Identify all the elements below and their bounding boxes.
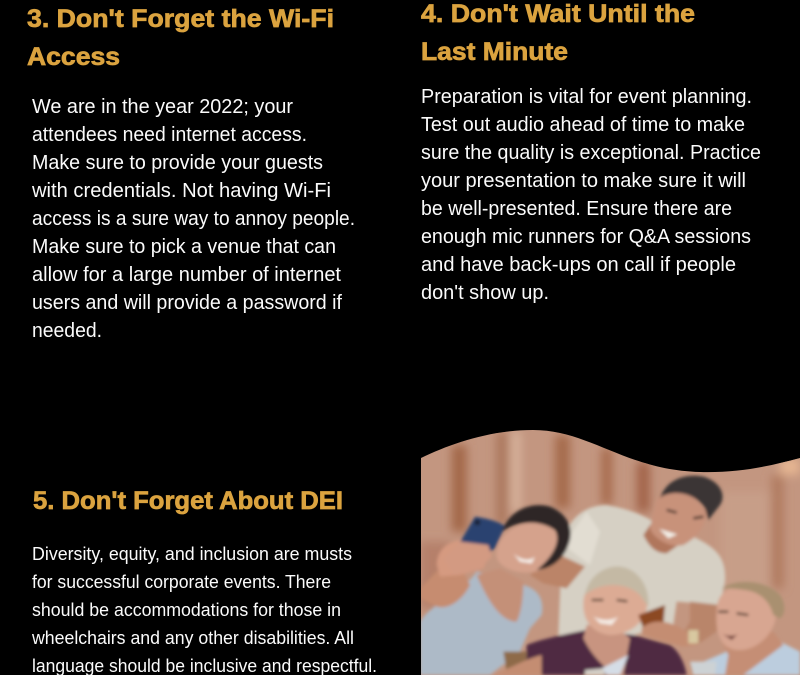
man in light shirt bbox=[700, 642, 800, 675]
glass and hand bbox=[638, 605, 665, 628]
text block: section 4 body: Test out audio ahead of time to make bbox=[421, 114, 745, 136]
woman's face and hair bbox=[496, 523, 560, 572]
woman in grey top bbox=[420, 572, 542, 675]
text block: section 5 body bbox=[31, 543, 377, 675]
drinks at bottom bbox=[503, 652, 527, 672]
text block: section 3 body: access is a sure way to annoy people. bbox=[32, 208, 355, 230]
text block: section 4 body: don't show up. bbox=[421, 282, 549, 304]
heading: section 4: Last Minute bbox=[421, 38, 568, 66]
text block: section 3 body: users and will provide a password if bbox=[32, 292, 342, 314]
heading: section 4 bbox=[421, 0, 695, 66]
blond man's face bbox=[582, 584, 648, 636]
heading: section 5: 5. Don't Forget About DEI bbox=[33, 487, 343, 515]
text block: section 3 body: with credentials. Not having Wi-Fi bbox=[31, 180, 331, 202]
text block: section 3 body: Make sure to pick a venue that can bbox=[32, 236, 336, 258]
text block: section 4 body: sure the quality is exceptional. Practice bbox=[421, 142, 761, 164]
text block: section 5 body: Diversity, equity, and inclusion are musts bbox=[32, 543, 352, 564]
heading: section 3: Access bbox=[27, 43, 120, 71]
panel: section 4 last minute bbox=[421, 0, 761, 304]
man in purple sweater bbox=[527, 630, 687, 675]
text block: section 4 body: be well-presented. Ensure there are bbox=[421, 198, 732, 220]
heading: section 3: 3. Don't Forget the Wi-Fi bbox=[27, 5, 334, 33]
text block: section 4 body: your presentation to make sure it will bbox=[421, 170, 746, 192]
heading: section 3 bbox=[27, 5, 334, 71]
text block: section 3 body: needed. bbox=[32, 320, 102, 342]
text block: section 5 body: wheelchairs and any other disabilities. All bbox=[31, 627, 354, 648]
text block: section 4 body bbox=[421, 86, 761, 304]
photo: four friends taking a selfie against a rusty wall bbox=[420, 425, 800, 675]
text block: section 4 body: and have back-ups on call if people bbox=[421, 254, 736, 276]
text block: section 3 body: Make sure to provide your guests bbox=[32, 152, 323, 174]
panel: section 3 Wi-Fi access bbox=[27, 5, 355, 342]
man's arm behind the woman bbox=[530, 553, 585, 588]
text block: section 5 body: should be accommodations for those in bbox=[32, 599, 341, 620]
man in white t-shirt bbox=[558, 505, 725, 635]
text block: section 3 body: allow for a large number of internet bbox=[32, 264, 341, 286]
wall streaks bbox=[420, 432, 800, 608]
text block: section 4 body: Preparation is vital for event planning. bbox=[421, 86, 752, 108]
text block: section 4 body: enough mic runners for Q&A sessions bbox=[421, 226, 751, 248]
panel: section 5 DEI bbox=[31, 487, 377, 675]
text block: section 3 body bbox=[31, 96, 355, 342]
phone bbox=[459, 514, 506, 552]
woman's hand over phone bbox=[457, 539, 493, 564]
heading: section 4: 4. Don't Wait Until the bbox=[421, 0, 695, 28]
text block: section 5 body: for successful corporate events. There bbox=[32, 571, 331, 592]
text block: section 3 body: attendees need internet access. bbox=[32, 124, 307, 146]
text block: section 3 body: We are in the year 2022; your bbox=[32, 96, 293, 118]
